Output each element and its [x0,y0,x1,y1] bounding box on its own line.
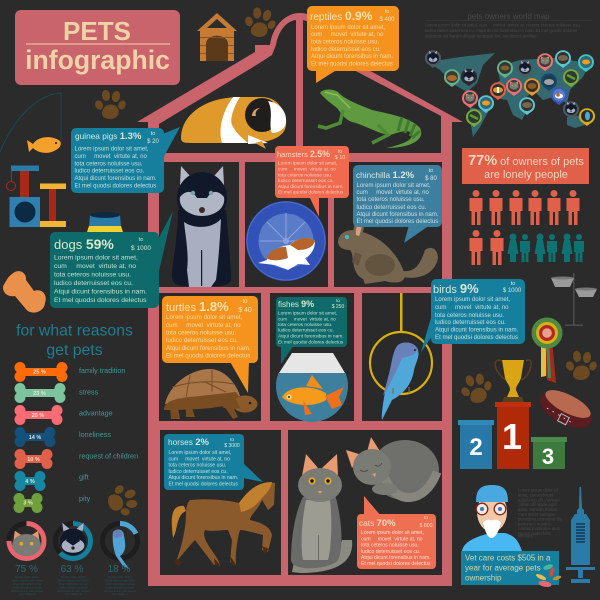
callout: turtles: $ 40 [238,307,252,314]
callout: chinchilla: ludico deterruisset eos cu. [356,205,427,211]
text: vet small copy: dolor. Aenean massa. [518,507,558,512]
callout: reptiles: Et mel quodsi dolores delectus [311,62,393,68]
donut captions: dicant definiebas eu mei [59,582,88,586]
pin horse [497,60,513,78]
reason labels: stress [79,388,99,396]
callout: hamsters: to [338,149,342,155]
pin grey animal [541,73,557,91]
callout: dogs: $ 1000 [131,245,151,252]
callout: cats [357,496,436,569]
callout: chinchilla: $ 80 [425,176,437,182]
reason labels: gift [79,472,89,482]
pin fish [478,95,494,113]
callout: hamsters: Et mel quodsi dolores delectus [278,190,344,196]
callout: guinea pigs [71,127,180,193]
animal: husky [172,166,231,287]
pin brown animal 2 [519,97,535,115]
callout: horses: $ 3000 [224,443,240,449]
callout: guinea pigs: to [151,131,155,137]
bone 10% [14,449,52,469]
callout: fishes [276,297,347,364]
donut: cat 75%: 75 % [15,564,38,575]
animal: guinea pig [181,97,286,149]
title panel: infographic [25,45,170,75]
callout: birds: Et mel quodsi dolores delectus [435,334,518,341]
callout: reptiles: Atqui dicunt forensibus in nam. [311,54,393,60]
icon: pills [535,563,562,588]
callout: fishes: to [336,298,340,303]
callout: chinchilla: Et mel quodsi dolores delectus [356,219,438,225]
donut captions: vero tibique ut [19,592,36,596]
animal: iguana [318,89,421,148]
donut captions: vero tibique ut [65,592,82,596]
callout: birds: $ 1000 [503,288,522,294]
callout: guinea pigs: Lorem ipsum dolor sit amet, [74,146,149,152]
animal: chinchilla [338,218,438,284]
bone 4% [14,471,46,491]
callout: fishes: Lorem ipsum dolor sit amet, [278,310,337,316]
callout: turtles: tota ceteros noluisse usu. [166,330,236,336]
callout: reptiles: Lorem ipsum dolor sit amet, [311,25,385,31]
callout: turtles: Atqui dicunt forensibus in nam. [166,345,251,352]
pin husky 4 [563,101,579,119]
heading: world map [425,12,592,38]
callout: dogs: Lorem ipsum dolor sit amet, [54,254,138,262]
callout: horses: Lorem ipsum dolor sit amet, [168,450,231,456]
panel: 77% of owners: 77% of owners of pets [468,153,584,169]
callout: chinchilla: chinchilla 1.2% [356,170,415,181]
bone 23%: 23 % [33,391,46,397]
callout: reptiles [307,6,399,83]
text: vet small copy: parturient montes, [518,522,552,526]
donut captions: Sit nam tation dolore [15,575,40,579]
icon: paw by reasons [104,480,142,521]
icon: orange bone [3,271,46,313]
callout: fishes: ludico deterruisset eos cu. [278,328,334,334]
callout: fishes: Et mel quodsi dolores delectus [278,340,344,346]
callout: hamsters: cum movet virtute at, no [278,166,336,172]
panel: vet care cost: Vet care costs $505 in a [465,554,551,562]
icon: paw near podium [456,369,497,407]
icon: paw under title [94,89,127,119]
callout: cats: cum movet virtute at, no [361,536,423,542]
callout: horses: ludico deterruisset eos cu. [168,469,228,475]
pin hamster [551,87,567,105]
pin lizard 2 [563,69,579,87]
icon: paw top [242,5,279,39]
animal: goldfish bowl [276,353,348,422]
callout: guinea pigs: tota ceteros noluisse usu. [74,162,143,168]
podium 1: 1 [502,416,522,457]
callout: chinchilla: to [429,168,433,174]
reason labels: pity [79,494,91,503]
icon: bowl stand [551,273,597,326]
pin husky 3 [517,60,533,78]
donut captions: Sit nam tation dolore [108,575,133,579]
callout: hamsters: hamsters 2.5% [277,149,330,159]
donut: bird 18%: 18 % [108,564,131,575]
text: vet small copy: nascetur ridiculus mus. [518,526,561,531]
callout: fishes: $ 250 [332,304,344,310]
pin bird [579,108,595,126]
callout: guinea pigs: Et mel quodsi dolores delectus [74,184,156,190]
callout: reptiles: $ 400 [379,17,395,23]
callout: birds: to [511,281,515,287]
callout: hamsters [275,146,349,217]
panel: 77% of owners [462,148,589,184]
text: vet small copy: Lorem ipsum dolor sit [518,488,559,492]
panel: 77% of owners: are lonely people [484,169,568,181]
callout: horses: tota ceteros noluisse usu. [168,462,226,468]
icon: rosette [532,318,562,383]
pin cat 2 [506,78,522,96]
podium [458,402,567,469]
callout: horses [164,434,263,490]
callout: dogs [50,211,173,308]
bone 14%: 14 % [29,435,41,441]
donut captions: debitis adipisci nam lorem [105,578,136,582]
podium 2: 2 [469,434,483,461]
pin husky [425,50,441,68]
person row 2 teal couples [508,234,584,262]
animal: sitting cat [291,454,352,573]
callout: turtles: to [242,299,248,305]
callout: fishes: cum movet virtute at, no [278,316,336,322]
bone 23% [14,383,66,403]
callout: hamsters: Atqui dicunt forensibus in nam. [278,184,344,190]
icon: paw right [565,350,598,380]
reason labels: loneliness [79,430,111,439]
callout: reptiles: cum movet virtute at, no [311,32,384,38]
callout: fishes: fishes 9% [278,299,314,309]
donut: dog 63% [56,523,90,575]
callout: guinea pigs: Atqui dicunt forensibus in nam. [74,176,157,182]
donut captions: labores eos et nam ubique [104,589,136,593]
callout: chinchilla: cum movet virtute at, no [356,190,430,196]
pin guinea pig [490,82,506,100]
heading: for what reasons: for what reasons [16,322,133,340]
callout: reptiles: to [385,9,389,15]
reason labels: request of children [79,452,138,460]
callout: guinea pigs: $ 20 [147,139,159,145]
icon: cat tree [6,166,66,227]
callout: cats: to [424,515,428,521]
donut: bird 18% [102,524,138,575]
callout: cats: Atqui dicunt forensibus in nam. [361,555,431,561]
callout: birds: Atqui dicunt forensibus in nam. [435,326,519,334]
callout: dogs: tota ceteros noluisse usu. [54,272,131,278]
animal: hamster wheel [246,201,326,281]
bone 25% [14,362,68,382]
podium 3: 3 [542,444,554,469]
reason labels: advantage [79,408,113,418]
callout: cats: $ 800 [420,523,433,529]
bone 4%: 4 % [25,479,35,485]
bone 10%: 10 % [27,457,40,463]
callout: turtles: Lorem ipsum dolor sit amet, [166,314,243,321]
reason labels [79,366,138,503]
callout: dogs: Et mel quodsi dolores delectus [54,297,147,304]
callout: reptiles: ludico deterruisset eos cu. [311,47,381,53]
icon: collar [535,385,597,435]
callout: birds: birds 9% [433,281,479,296]
text: vet small copy: penatibus et magnis dis [518,516,562,522]
bone 20% [14,405,62,425]
bone 20%: 20 % [32,413,44,419]
reason labels: family tradition [79,366,125,375]
text: vet small copy: Donec quam felis, [518,531,552,536]
animal: budgie on ring [370,293,432,420]
callout: horses: cum movet virtute at, no [168,456,230,462]
donut: dog 63%: 63 % [61,564,84,575]
bone 14% [14,427,56,447]
animal: turtle [164,369,258,419]
callout: cats: Et mel quodsi dolores delectus [361,561,431,567]
callout: dogs: ludico deterruisset eos cu. [54,280,133,287]
callout: turtles: Et mel quodsi dolores delectus [166,352,250,360]
heading: for what reasons: get pets [46,342,103,359]
callout: dogs: dogs 59% [54,236,114,252]
bone 25%: 25 % [33,370,46,376]
pin brown animal [444,69,460,87]
callout: chinchilla: tota ceteros noluisse usu. [356,197,425,203]
text: vet small copy: commodo ligula eget [518,502,557,507]
pictogram: owners [470,190,584,265]
text: vet small copy: amet, consectetuer [518,492,554,498]
world map [425,50,595,137]
donut captions: debitis adipisci nam lorem [58,578,89,582]
callout: turtles: ludico deterruisset eos cu. [166,337,238,344]
donut captions: dicant definiebas eu mei [13,582,42,586]
callout: birds: cum movet virtute at, no [435,304,509,311]
callout: birds: tota ceteros noluisse usu. [435,312,504,319]
text: vet small copy [518,488,562,538]
icon: dog house [197,13,237,61]
callout: chinchilla: Lorem ipsum dolor sit amet, [356,183,431,189]
donut captions: mollis electram nominati [13,586,42,590]
callout: guinea pigs: cum movet virtute at, no [74,154,148,160]
callout: hamsters: Lorem ipsum dolor sit amet, [278,160,337,166]
callout: chinchilla [353,165,442,243]
callout: dogs: Atqui dicunt forensibus in nam. [54,288,147,296]
house frame [137,13,463,586]
panel: vet care cost: year for average pets [465,564,541,572]
callout: chinchilla: Atqui dicunt forensibus in nam. [356,212,439,218]
icon: dog bowl [87,212,123,232]
donut captions: labores eos et nam ubique [11,589,43,593]
callout: horses: to [230,437,234,443]
animal: sleeping cat [346,437,439,500]
callout: horses: horses 2% [168,437,210,448]
donut captions: mollis electram nominati [106,586,135,590]
callout: dogs: cum movet virtute at, no [54,263,136,270]
pin husky 2 [461,69,477,86]
callout: cats: Lorem ipsum dolor sit amet, [361,530,424,536]
callout: horses: Et mel quodsi dolores delectus [168,482,238,488]
callout: birds [421,279,525,352]
callout: dogs: to [139,237,143,243]
callout: guinea pigs: guinea pigs 1.3% [75,131,142,142]
panel: vet care cost [461,551,559,585]
callout: reptiles: tota ceteros noluisse usu. [311,40,379,46]
vet figure [462,485,522,551]
donut captions: vero tibique ut [112,592,129,596]
donut captions: Sit nam tation dolore [61,575,86,579]
pin cat [462,90,478,108]
icon: trophy [495,360,531,402]
callout: reptiles: reptiles 0.9% [310,9,373,23]
text: vet small copy: Cum sociis natoque [518,512,555,517]
bone 3% [14,493,42,513]
callout: cats: tota ceteros noluisse usu. [361,542,419,548]
bone 3%: 3 % [23,500,33,506]
donut captions [11,575,136,596]
panel: vet care cost: ownership [465,574,502,582]
title panel [15,10,180,85]
callout: turtles [162,296,258,393]
callout: guinea pigs: ludico deterruisset eos cu. [74,168,145,174]
donut: cat 75% [9,524,44,575]
callout: turtles: cum movet virtute at, no [166,322,241,329]
callout: cats: ludico deterruisset eos cu. [361,549,420,555]
icon: fishing rod with fish [0,93,61,153]
callout: turtles: turtles 1.8% [166,299,229,314]
title panel: PETS [63,16,131,46]
text: vet small copy: adipiscing elit. Aenean [518,498,560,502]
callout: hamsters: ludico deterruisset eos cu. [278,178,334,184]
pin cat 3 [537,53,553,71]
icon: syringe [566,487,595,583]
callout: birds: Lorem ipsum dolor sit amet, [435,296,510,303]
map continents [428,53,590,137]
callout: fishes: Atqui dicunt forensibus in nam. [278,334,344,340]
donut captions: dicant definiebas eu mei [106,582,135,586]
person row 2 coral [470,230,504,265]
pin lizard [466,109,482,127]
person row 1 [470,190,580,225]
heading: world map: Lorem ipsum dolor sit amet, cum movet virtute at, no tota ceteros noluisse usu. [425,22,581,28]
donut captions: labores eos et nam ubique [57,589,89,593]
text: vet small copy: ultricies. [518,534,533,538]
callout: birds: ludico deterruisset eos cu. [435,319,506,326]
callout: fishes: tota ceteros noluisse usu. [278,322,332,328]
chart: reasons bones [14,362,68,513]
donut captions: debitis adipisci nam lorem [12,578,43,582]
heading: world map: pets owners world map [467,12,550,21]
callout: hamsters: tota ceteros noluisse usu. [278,172,332,178]
animal: horse [172,482,275,566]
heading: world map: ludico deterruisset eos cu. Atqui dicunt forensibus in nam. Et mel quodsi dolores [425,28,577,33]
pin chinchilla [555,50,571,68]
callout: hamsters: $ 10 [335,155,345,161]
donut captions: mollis electram nominati [59,586,88,590]
callout: cats: cats 70% [359,518,396,529]
callout: horses: Atqui dicunt forensibus in nam. [168,475,238,481]
pin fish 2 [578,54,594,72]
heading: world map: delectus. Ad harum aliquip recteque est, est dicunt similiter. [425,34,538,38]
heading: for what reasons [16,322,133,359]
pin turtle [524,78,540,96]
